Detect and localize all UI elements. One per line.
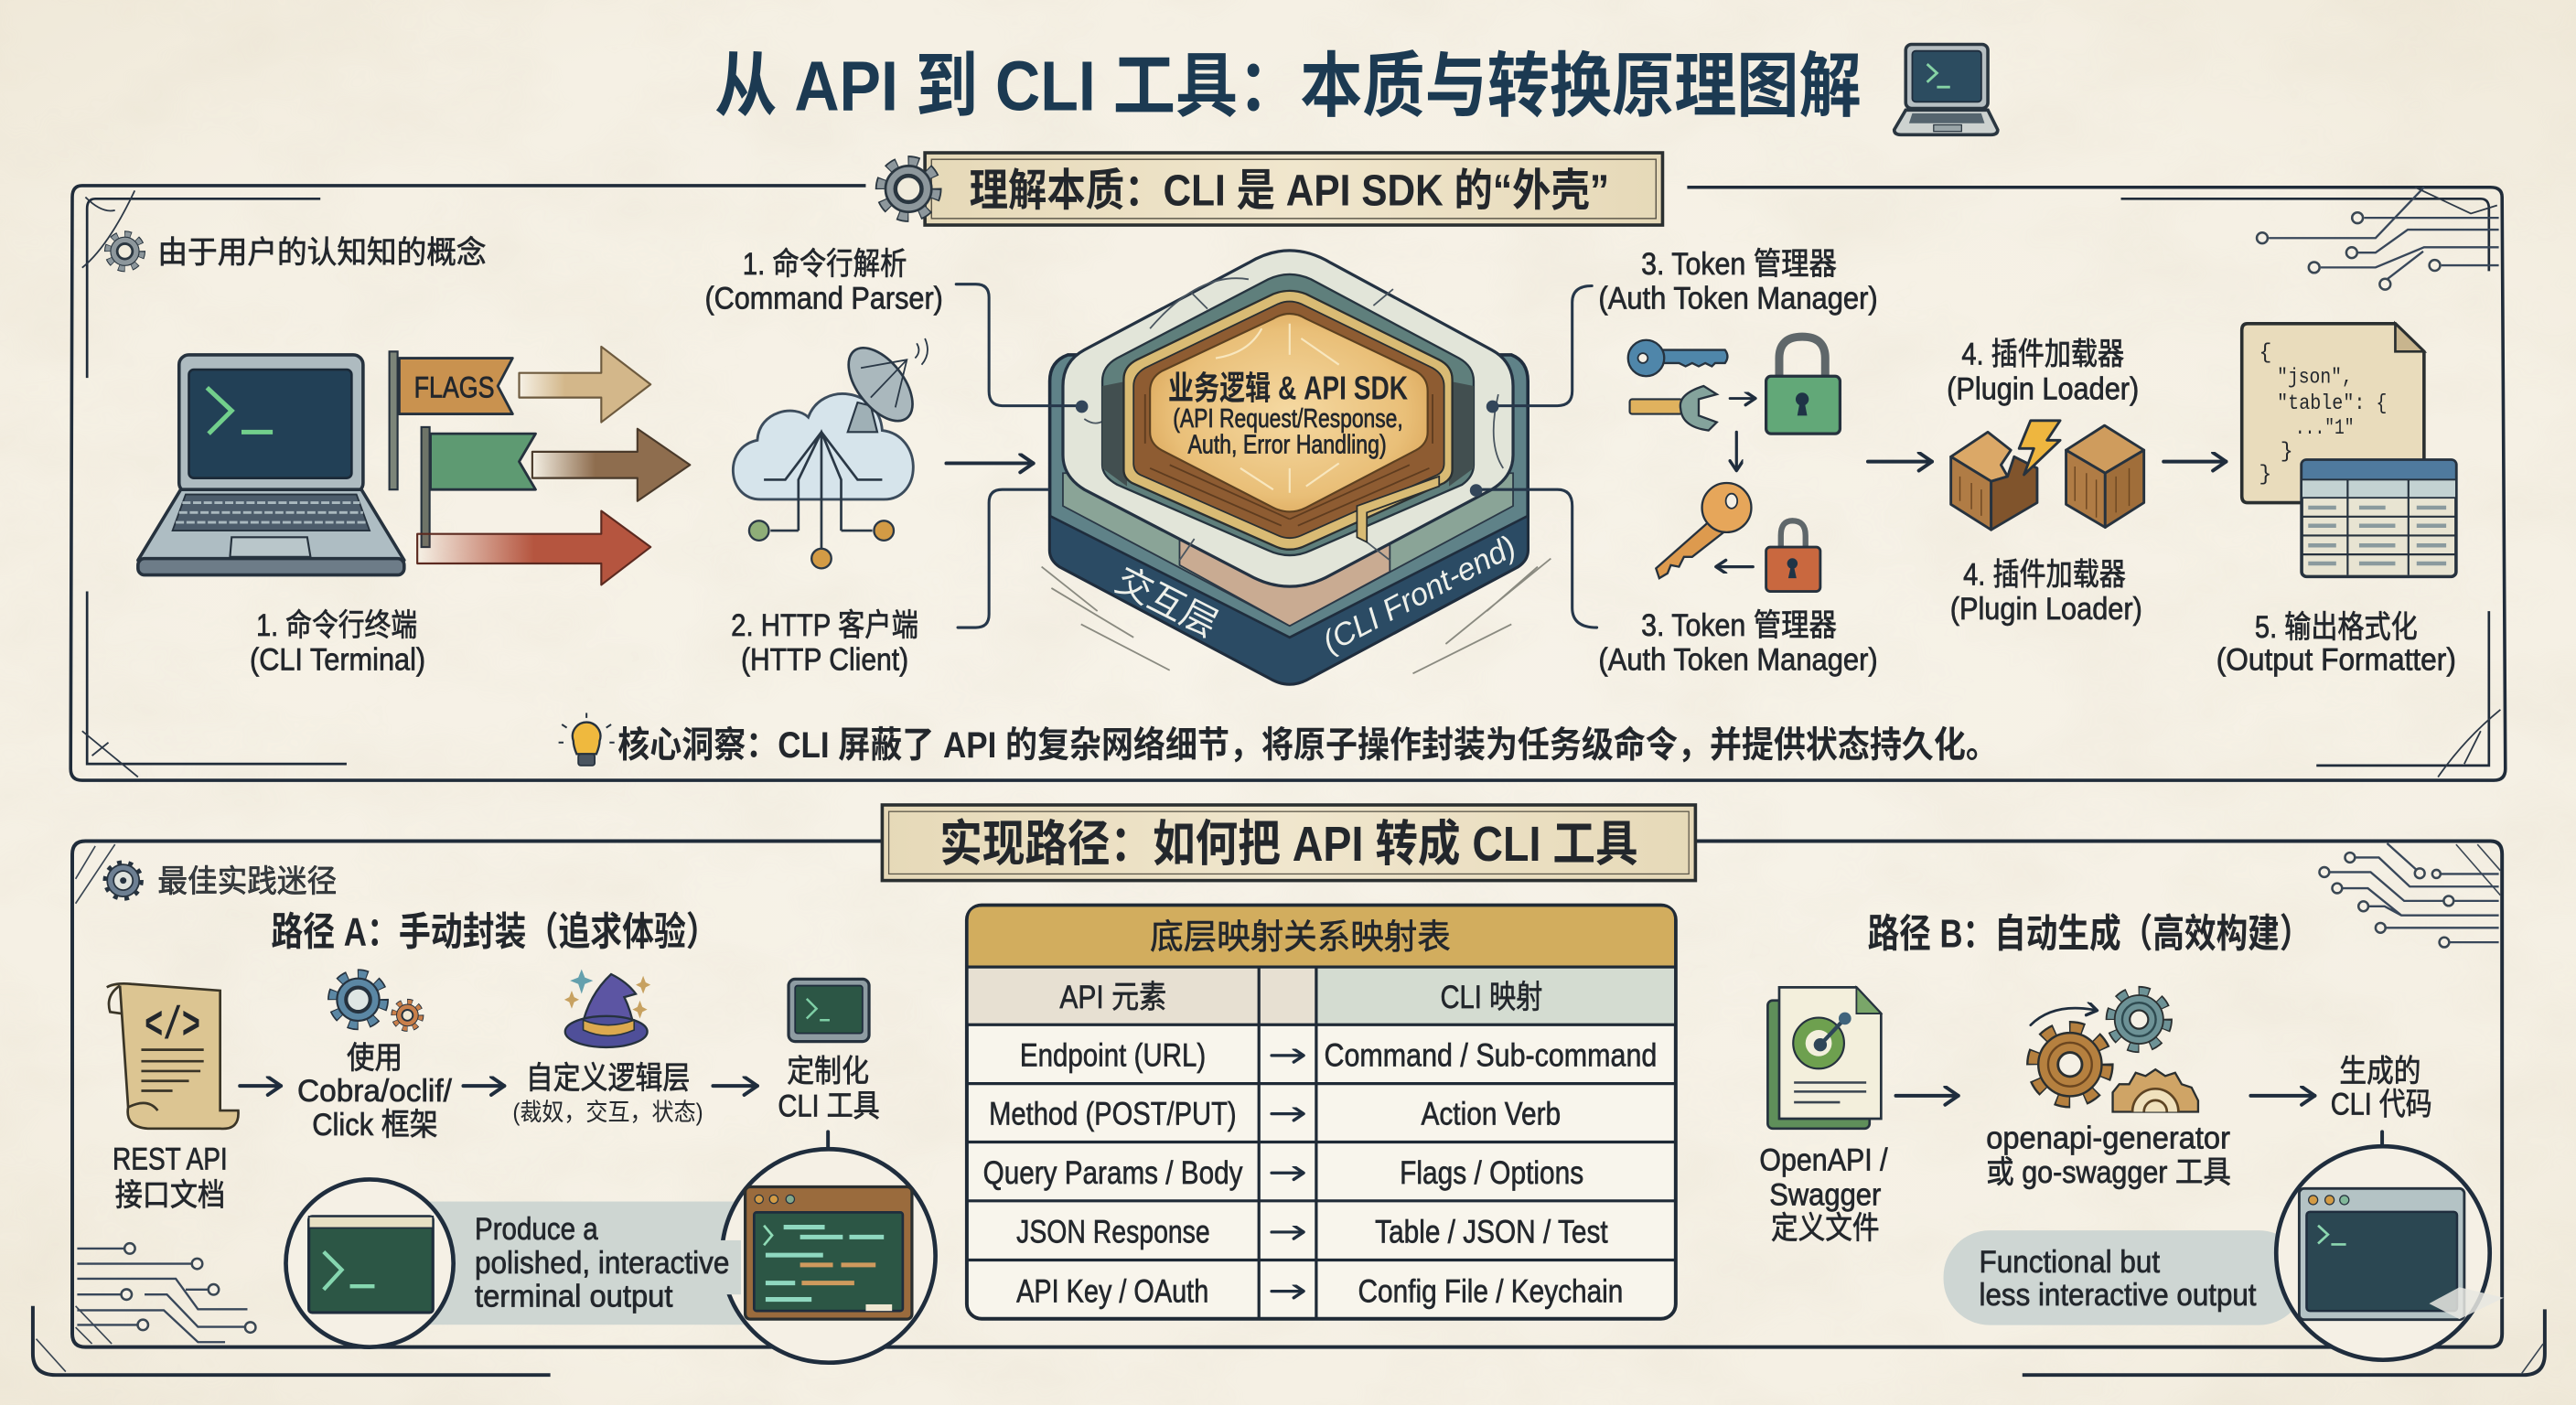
icon: cloud with dish <box>733 337 928 568</box>
front-end label: (CLI Front-end) <box>1317 529 1521 660</box>
icon: OpenAPI doc <box>1767 987 1881 1129</box>
callout text: Functional but <box>1980 1245 2161 1280</box>
label: generated code: CLI 代码 <box>2331 1088 2432 1122</box>
layered hexagon: CLI over SDK <box>1042 251 1551 684</box>
outer ring <box>1063 251 1513 586</box>
label: CLI terminal: (CLI Terminal) <box>250 643 425 678</box>
heading: path B: 路径 B：自动生成（高效构建） <box>1868 912 2311 956</box>
label: REST API docs: 接口文档 <box>115 1178 225 1213</box>
icon: output table <box>2302 460 2456 576</box>
label: HTTP client: 2. HTTP 客户端 <box>731 608 918 643</box>
label: token manager top: 3. Token 管理器 <box>1641 247 1837 282</box>
icon: REST API scroll <box>107 983 239 1129</box>
callout text <box>475 1212 729 1314</box>
callout text: terminal output <box>475 1280 673 1314</box>
icon: laptop <box>138 355 404 575</box>
callout text: Produce a <box>475 1212 598 1247</box>
icon: json document <box>2242 324 2424 503</box>
arrow: token to plugin <box>1868 461 1932 463</box>
arrow: A step 2 <box>463 1085 504 1087</box>
mapping table <box>967 906 1676 1319</box>
label: plugin loader bottom: 4. 插件加载器 <box>1963 557 2126 592</box>
arrow: down between locks <box>1735 432 1737 470</box>
wood ring <box>1133 302 1444 538</box>
icon: small terminal <box>789 979 869 1042</box>
label: generator: 或 go-swagger 工具 <box>1986 1155 2231 1190</box>
label: OpenAPI swagger: Swagger <box>1769 1177 1881 1212</box>
table rows <box>983 1038 1657 1309</box>
label: custom logic: (裁奴，交互，状态) <box>512 1099 703 1126</box>
panel: understanding essence <box>70 153 2506 780</box>
label: framework <box>297 1041 452 1142</box>
panel: implementation paths <box>33 805 2545 1375</box>
label: OpenAPI swagger: OpenAPI / <box>1759 1143 1888 1178</box>
banner: understand essence <box>925 153 1662 225</box>
label: generated code: 生成的 <box>2339 1055 2420 1089</box>
core text <box>1168 369 1408 460</box>
callout: functional output <box>1944 1146 2504 1360</box>
label: token manager bottom <box>1598 608 1878 678</box>
label: custom CLI tool <box>778 1055 880 1123</box>
label: framework: 使用 <box>347 1041 402 1076</box>
label: token manager bottom: (Auth Token Manager) <box>1598 643 1878 678</box>
hexagon base <box>1050 355 1528 684</box>
banner: implementation: 实现路径：如何把 API 转成 CLI 工具 <box>939 817 1638 872</box>
icon: generator gears <box>2031 992 2198 1111</box>
table column headers: CLI 映射 <box>1440 980 1542 1015</box>
panel frame <box>70 186 2506 780</box>
label: REST API docs <box>113 1142 228 1213</box>
icon: circuit traces lower right <box>2319 843 2499 948</box>
small lens terminal <box>285 1179 454 1347</box>
icon: light bulb <box>559 713 615 766</box>
arrow: B to output <box>2381 1132 2383 1176</box>
icon: json document: { <box>2259 342 2271 366</box>
callout text <box>1980 1245 2257 1313</box>
label: custom CLI tool: 定制化 <box>787 1055 869 1089</box>
label: custom logic: 自定义逻辑层 <box>526 1061 690 1096</box>
gold core <box>1150 314 1428 511</box>
table rows: Query Params / Body <box>983 1155 1243 1191</box>
icon: json document: "table": { <box>2277 392 2387 416</box>
label: plugin loader bottom <box>1950 557 2142 627</box>
panel frame <box>33 842 2545 1375</box>
icon: puzzle cubes <box>1951 421 2144 530</box>
table rows: JSON Response <box>1016 1215 1210 1250</box>
label: framework: Cobra/oclif/ <box>297 1074 452 1109</box>
label: output formatter <box>2216 610 2456 678</box>
label: plugin loader top: (Plugin Loader) <box>1947 371 2139 406</box>
label: output formatter: (Output Formatter) <box>2216 643 2456 678</box>
table arrows <box>1272 1056 1303 1292</box>
table rows: Config File / Keychain <box>1358 1273 1623 1309</box>
connectors to hexagon <box>956 284 1597 627</box>
table title bar <box>969 906 1674 967</box>
arrow: A step 1 <box>240 1085 281 1087</box>
arrow: back to key <box>1717 566 1753 568</box>
table rows: Action Verb <box>1421 1096 1561 1132</box>
label: custom CLI tool: CLI 工具 <box>778 1089 880 1123</box>
icon: flags: FLAGS <box>414 371 495 404</box>
icon: orange key and lock <box>1656 483 1820 592</box>
label: plugin loader top <box>1947 338 2139 406</box>
table column headers: API 元素 <box>1059 980 1166 1015</box>
label: CLI terminal <box>250 608 425 678</box>
table rows: API Key / OAuth <box>1016 1273 1208 1309</box>
arrow: A to output <box>827 1132 829 1176</box>
callout text: less interactive output <box>1980 1278 2257 1313</box>
table rows: Endpoint (URL) <box>1020 1038 1206 1074</box>
icon: REST API scroll: </> <box>145 1001 200 1053</box>
icon: flags <box>390 351 535 547</box>
label: command parser: 1. 命令行解析 <box>743 247 907 282</box>
front-end label <box>1110 529 1521 660</box>
arrow: plugin to output <box>2163 461 2226 463</box>
icon: json document: } <box>2281 440 2293 464</box>
label: HTTP client: (HTTP Client) <box>741 643 908 678</box>
table grid <box>968 967 1676 1319</box>
notch in gold ring <box>1357 477 1439 542</box>
table rows: Command / Sub-command <box>1325 1038 1657 1074</box>
callout text: polished, interactive <box>475 1246 729 1281</box>
banner: implementation <box>882 805 1695 881</box>
label: OpenAPI swagger: 定义文件 <box>1771 1211 1880 1246</box>
icon: keys and green lock <box>1628 337 1840 434</box>
label: token manager bottom: 3. Token 管理器 <box>1641 608 1837 643</box>
subheading: best practice: 最佳实践迷径 <box>157 864 337 899</box>
icon: json document: "json", <box>2277 366 2353 390</box>
arrows: flag outputs <box>417 347 690 585</box>
callout: core insight <box>559 713 1998 766</box>
gold ring <box>1123 291 1453 550</box>
table rows: Method (POST/PUT) <box>989 1096 1237 1132</box>
label: framework: Click 框架 <box>312 1108 438 1142</box>
hexagon shadow scribbles <box>1042 559 1551 673</box>
big lens terminal <box>716 1149 936 1363</box>
label: generated code <box>2331 1055 2432 1122</box>
arrow: B step 2 <box>2250 1095 2314 1097</box>
table rows: Flags / Options <box>1400 1155 1583 1191</box>
label: generator <box>1986 1121 2231 1190</box>
title: 从 API 到 CLI 工具：本质与转换原理图解 <box>714 47 1862 125</box>
label: generator: openapi-generator <box>1986 1121 2230 1155</box>
arrow: B step 1 <box>1895 1095 1959 1097</box>
callout bar <box>394 1202 747 1325</box>
heading: path A: 路径 A：手动封装（追求体验） <box>271 911 718 955</box>
label: plugin loader top: 4. 插件加载器 <box>1961 338 2124 372</box>
table title bar: 底层映射关系映射表 <box>1150 917 1451 956</box>
callout: core insight: 核心洞察：CLI 屏蔽了 API 的复杂网络细节，将原子操作封装为任务级命令，并提供状态持久化。 <box>617 725 1998 766</box>
table rows: Table / JSON / Test <box>1375 1215 1608 1250</box>
wood grain <box>1145 394 1433 526</box>
core text: 业务逻辑 & API SDK <box>1168 369 1408 406</box>
lens terminal <box>2276 1146 2504 1360</box>
icon: circuit traces top right <box>2257 188 2499 290</box>
label: token manager top: (Auth Token Manager) <box>1598 282 1878 316</box>
core text: (API Request/Response, <box>1173 404 1403 434</box>
icon: json document: ..."1" <box>2295 417 2355 441</box>
navy front band <box>1050 516 1528 684</box>
icon: framework gears <box>334 975 420 1028</box>
subheading: cognition concept: 由于用户的认知知的概念 <box>157 235 487 270</box>
dark inner sides <box>1102 381 1474 487</box>
icon: title laptop <box>1894 44 1998 134</box>
icon: wizard hat <box>564 970 650 1047</box>
table body <box>967 906 1676 1319</box>
front wall <box>1063 473 1513 626</box>
arrow: to core <box>946 462 1034 465</box>
label: REST API docs: REST API <box>113 1142 228 1177</box>
label: HTTP client <box>731 608 918 678</box>
icon: circuit traces bottom left <box>77 1243 255 1342</box>
label: custom logic <box>512 1061 703 1126</box>
callout: polished output <box>285 1149 936 1363</box>
core text: Auth, Error Handling) <box>1187 431 1387 460</box>
label: command parser <box>704 247 943 316</box>
teal ring <box>1102 274 1474 555</box>
icon: banner gear <box>882 163 935 215</box>
icon: json document: } <box>2259 463 2271 487</box>
label: token manager top <box>1598 247 1878 316</box>
callout pill <box>1944 1230 2305 1325</box>
label: output formatter: 5. 输出格式化 <box>2255 610 2418 645</box>
label: command parser: (Command Parser) <box>704 282 943 316</box>
label: CLI terminal: 1. 命令行终端 <box>256 608 417 643</box>
table column headers <box>969 967 1674 1024</box>
banner: understand essence: 理解本质：CLI 是 API SDK 的“外壳” <box>970 166 1609 215</box>
label: plugin loader bottom: (Plugin Loader) <box>1950 592 2142 627</box>
label: OpenAPI swagger <box>1759 1143 1888 1246</box>
arrow: A step 3 <box>713 1085 757 1087</box>
front-end label: 交互层 <box>1110 560 1224 645</box>
core circuit lines <box>1216 324 1339 493</box>
